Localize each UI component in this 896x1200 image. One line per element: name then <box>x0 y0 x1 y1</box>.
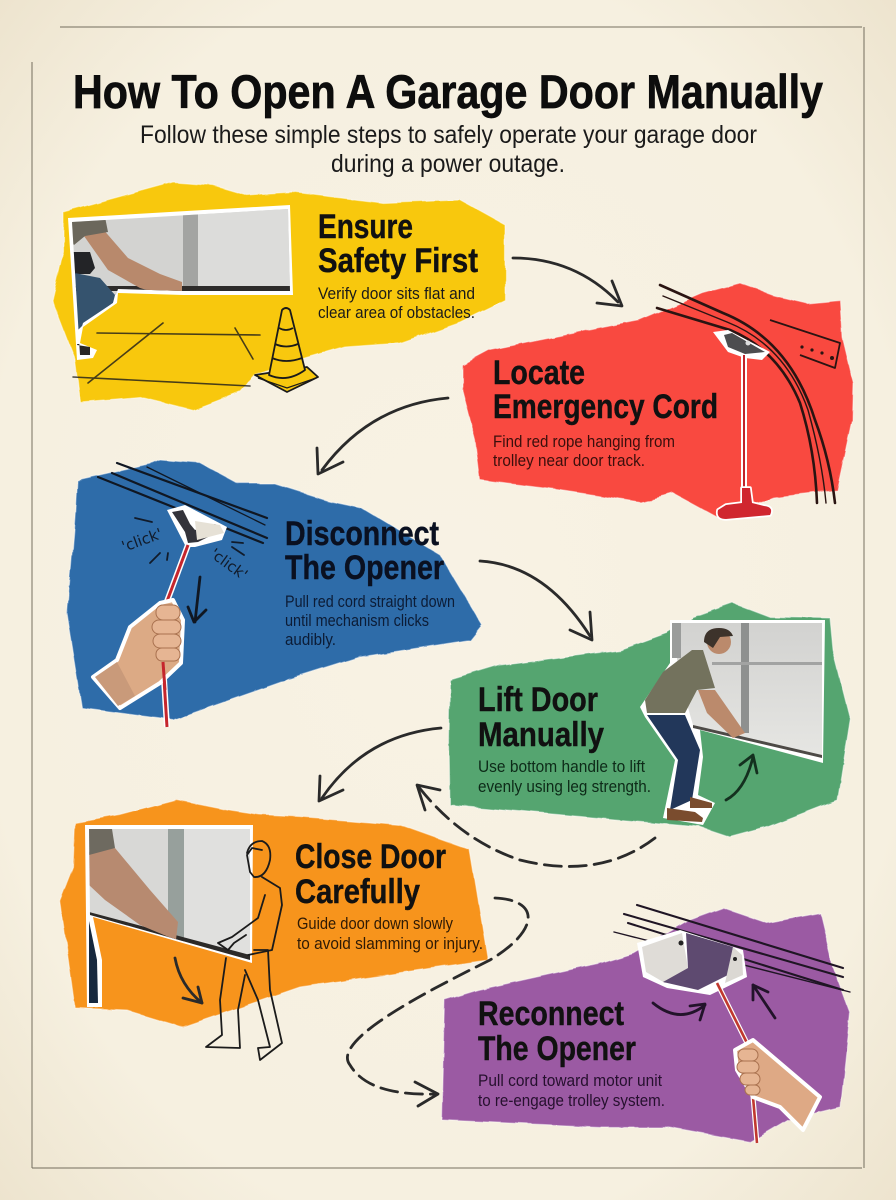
dashed arrow: close to reconnect <box>347 898 528 1106</box>
description: Find red rope hanging from <box>493 433 675 451</box>
red cord <box>163 545 188 727</box>
description: until mechanism clicks <box>285 612 429 630</box>
arrow: curved toward motor <box>653 1003 705 1020</box>
dashed arrow: back to lift <box>417 785 655 866</box>
photo: guiding door down <box>85 825 253 1007</box>
heading: Lift Door <box>478 681 598 719</box>
labels: click <box>119 525 251 584</box>
torn blue paper <box>67 460 482 720</box>
description: audibly. <box>285 631 336 649</box>
man figure <box>645 628 745 822</box>
arrow: step 3 to 4 <box>480 561 592 640</box>
torn red paper <box>462 283 853 517</box>
torn green paper <box>449 603 850 837</box>
hand gripping cord <box>93 600 183 708</box>
heading: The Opener <box>478 1030 636 1068</box>
heading: Disconnect <box>285 515 439 553</box>
heading: Safety First <box>318 242 478 280</box>
sketch man <box>206 841 282 1060</box>
hand gripping cord <box>735 1040 820 1130</box>
labels: click: 'click' <box>119 525 165 556</box>
description: Pull red cord straight down <box>285 593 455 611</box>
description: to avoid slamming or injury. <box>297 935 483 953</box>
description: evenly using leg strength. <box>478 778 651 796</box>
heading: Locate <box>493 354 585 392</box>
illustration: track and trolley <box>657 285 840 519</box>
arrow: step 2 to 3 <box>317 398 448 474</box>
description: clear area of obstacles. <box>318 304 475 322</box>
illustration: rails and trolley <box>98 463 267 547</box>
heading: Ensure <box>318 208 413 246</box>
click marks <box>135 518 244 563</box>
panel: ensure safety first <box>52 182 505 410</box>
icon: traffic cone <box>255 308 318 392</box>
arrow: lift up <box>726 755 757 800</box>
heading: Close Door <box>295 838 446 876</box>
photo: man lifting door <box>640 620 825 825</box>
arrow: step 4 to 5 <box>319 728 441 801</box>
torn purple paper <box>442 908 850 1142</box>
heading: Emergency Cord <box>493 388 718 426</box>
panel: locate emergency cord <box>462 283 853 519</box>
torn orange paper <box>60 800 488 1027</box>
description: Pull cord toward motor unit <box>478 1072 662 1090</box>
floor sketch lines <box>73 323 260 386</box>
heading: The Opener <box>285 549 444 587</box>
description: Use bottom handle to lift <box>478 758 645 776</box>
illustration: rails and motor unit <box>614 905 850 995</box>
subtitle: Follow these simple steps to safely operate your garage door <box>140 121 757 149</box>
panel: reconnect the opener <box>442 905 850 1143</box>
description: Verify door sits flat and <box>318 285 475 303</box>
arrow: pull down <box>188 577 206 622</box>
subtitle <box>140 121 757 178</box>
panel: close door carefully <box>60 800 488 1060</box>
panel: lift door manually <box>449 603 850 837</box>
arrow: guide down <box>175 958 202 1003</box>
arrow: step 1 to 2 <box>513 258 622 306</box>
photo: arm at door bottom <box>68 205 293 360</box>
red cord <box>717 983 757 1143</box>
heading: Manually <box>478 716 604 754</box>
labels: click: 'click' <box>207 545 251 584</box>
heading: Carefully <box>295 873 420 911</box>
description: Guide door down slowly <box>297 915 454 933</box>
heading: Reconnect <box>478 995 624 1033</box>
description: to re-engage trolley system. <box>478 1092 665 1110</box>
description: trolley near door track. <box>493 452 645 470</box>
panel: disconnect the opener <box>67 460 482 727</box>
subtitle: during a power outage. <box>331 150 565 178</box>
arrow: toward unit <box>753 985 775 1018</box>
torn yellow paper <box>52 182 505 410</box>
